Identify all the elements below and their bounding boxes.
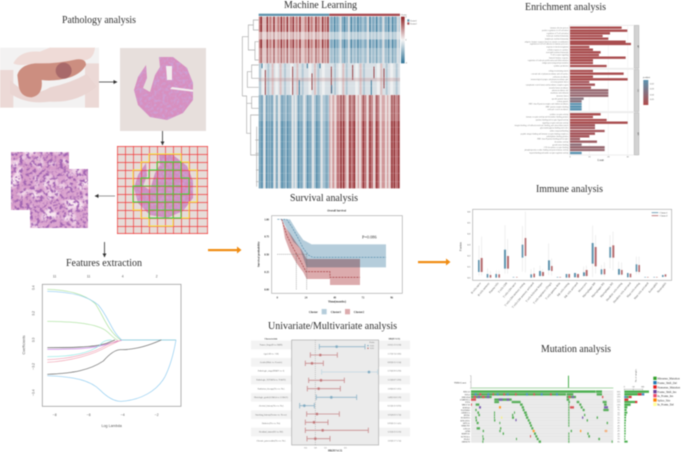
enrichment term labels: regulation of leukocyte proliferation and differentiation (528, 59, 568, 62)
enrichment count axis: Count (597, 159, 604, 162)
immune legend (652, 212, 668, 218)
oncoplot gene labels: PLEC (464, 438, 470, 441)
oncoplot percentage labels: 3% (617, 436, 620, 438)
KM axis labels: Survival probability (257, 241, 261, 267)
oncoplot percentage labels: 54% (617, 394, 621, 396)
forest text columns: Age(≥60 vs. <60) (263, 352, 279, 355)
oncoplot percentage labels (617, 391, 621, 443)
immune y axis: 0.3 (467, 245, 471, 247)
oncoplot percentage labels: 20% (617, 397, 621, 399)
forest axis: 1.0 (314, 447, 317, 449)
chart: LASSO coefficient paths: 0.0 (32, 338, 36, 342)
oncoplot percentage labels: 5% (617, 412, 620, 414)
enrichment term labels: heparin binding and amide receptor regulator activity (529, 152, 568, 155)
oncoplot percentage labels: 4% (617, 425, 620, 427)
enrichment term labels: antigen processing and presentation (542, 62, 568, 65)
forest text columns: Pathologic_T(T3&T4 vs. T1&T2) (256, 379, 286, 382)
enrichment colour legend: 0.05 (650, 99, 655, 101)
KM axis labels: 0 (277, 296, 279, 299)
immune cell type labels: T cells follicular helper (525, 282, 543, 303)
enrichment term labels: plasma membrane raft (552, 89, 569, 92)
heatmap colour legend: Cluster1 (410, 19, 417, 22)
oncoplot legend: Nonsense_Mutation (657, 385, 681, 389)
enrichment colour legend: 0.03 (650, 88, 655, 90)
chart: LASSO coefficient paths: 11 (87, 274, 91, 278)
chart: enrichment bar chart (515, 25, 655, 162)
arrow: orange to middle column (208, 246, 242, 254)
oncoplot gene labels: ARID1A (461, 412, 470, 415)
enrichment term labels: T cell receptor signaling (551, 54, 568, 57)
forest text columns: 2.02(1.13-3.58) (388, 344, 401, 347)
enrichment term labels: endocytic vesicle membrane (548, 109, 569, 111)
enrichment term labels: leukocyte mediated immunity (546, 36, 568, 38)
immune y axis: Fraction (460, 242, 463, 251)
heatmap lower block (259, 95, 400, 188)
arrow: grid to patches (95, 195, 115, 197)
forest text columns: 1.31(0.55-3.10) (388, 431, 401, 434)
chart: LASSO coefficient paths: 11 (53, 274, 57, 278)
enrichment term labels: glycosaminoglycan binding molecules (540, 127, 569, 130)
enrichment term labels: regulation of cell-cell adhesion in immune processes (530, 43, 569, 46)
forest text columns: Gender(Male vs. Female) (260, 361, 282, 364)
chart: clustered heatmap (242, 13, 417, 188)
title: Survival analysis: Survival analysis (290, 193, 358, 204)
oncoplot gene labels: DNAH11 (460, 419, 471, 422)
chart: LASSO coefficient paths (22, 274, 181, 428)
forest text columns: Tumor_Stage(II vs. I&III) (260, 344, 283, 347)
immune cell type labels: T cells CD8 (498, 282, 509, 294)
chart: LASSO coefficient paths: −6 (87, 413, 91, 417)
enrichment term labels: cellular response to cytokine (547, 49, 569, 51)
enrichment term labels: humoral immune response (549, 57, 568, 59)
immune cell type labels: T cells CD4 memory resting (504, 282, 526, 307)
oncoplot gene labels: PCDH15 (461, 417, 471, 420)
immune cell type labels: NK cells activated (564, 282, 579, 299)
KM axis labels (257, 209, 394, 304)
KM axis labels: 48 (333, 296, 337, 299)
oncoplot gene labels: ATM (465, 430, 471, 433)
forest axis: 1.5 (324, 447, 327, 449)
KM confidence band: Cluster1 (282, 219, 386, 267)
KM axis labels: 0.50 (264, 253, 270, 256)
heatmap dendrogram (242, 20, 259, 187)
forest legend: >0.05 (370, 347, 374, 350)
immune cell type labels: Plasma cells (489, 282, 499, 294)
forest text columns: 3.70(0.90-5.98) (388, 370, 401, 373)
enrichment term labels: immune receptor activity and chemokine binding proteins (526, 116, 569, 119)
immune cell type labels: T cells regulatory (Tregs) (533, 282, 552, 305)
immune cell type labels: T cells CD4 memory activated (512, 282, 535, 309)
forest text columns: Characteristic (264, 339, 278, 341)
immune y axis: 0.4 (467, 234, 471, 236)
enrichment term labels: adaptive immune response based on somatic recombination (525, 41, 568, 43)
forest text columns: 1.48(1.04-2.10) (388, 396, 401, 399)
enrichment colour legend: 0.04 (650, 94, 655, 96)
enrichment BP bars (570, 28, 631, 66)
immune cell type labels: NK cells resting (557, 282, 571, 297)
oncoplot gene labels: TP53 (465, 393, 471, 396)
forest text columns: Residual_tumor(R1 vs. R0) (259, 431, 283, 434)
enrichment term labels: cytokine production (554, 66, 568, 68)
oncoplot side axis: 100 (641, 386, 644, 388)
immune cell type labels: Macrophages M2 (600, 282, 615, 298)
oncoplot percentage labels: 4% (617, 428, 620, 430)
enrichment count axis (569, 157, 629, 162)
KM legend (309, 309, 365, 314)
image: extracted tissue patches (11, 152, 88, 228)
enrichment term labels: growth factor binding (552, 143, 568, 146)
enrichment term labels (515, 26, 569, 155)
enrichment count axis: 10 (588, 157, 590, 159)
oncoplot gene labels: GNAS (463, 427, 471, 430)
forest text columns (254, 338, 401, 442)
forest axis: 2.5 (344, 447, 347, 449)
heatmap colour legend: 0 (405, 40, 406, 42)
enrichment term labels: collagen-containing matrix (549, 70, 568, 73)
enrichment term labels: peptide antigen binding and immune receptor binding complexes (521, 132, 569, 135)
chart: LASSO coefficient paths: −0.4 (32, 389, 36, 396)
arrow: slide to grid (162, 131, 164, 145)
oncoplot percentage labels: 11% (617, 399, 621, 401)
chart: LASSO coefficient paths: −8 (53, 413, 57, 417)
immune y axis (460, 211, 471, 279)
title: Features extraction: Features extraction (66, 258, 143, 269)
title: Mutation analysis: Mutation analysis (541, 344, 611, 355)
oncoplot legend: In_Frame_Del (657, 403, 674, 407)
enrichment term labels: CCR chemokine receptor binding (544, 146, 568, 149)
immune legend: Cluster1 (660, 212, 668, 215)
immune cell type labels: Mast cells resting (626, 282, 641, 298)
immune cell type labels: T cells CD4 naive (502, 281, 518, 299)
enrichment term labels: neutrophil mediated immunity (546, 52, 568, 54)
enrichment colour legend: 0.02 (650, 84, 654, 86)
enrichment term labels: sulfur compound binding (550, 130, 568, 133)
enrichment MF bars (570, 114, 628, 153)
oncoplot gene labels: OBSCN (462, 441, 470, 444)
immune boxes: Cluster2 (481, 238, 666, 278)
arrow: illustration to slide (99, 81, 117, 83)
title: Pathology analysis: Pathology analysis (62, 15, 136, 26)
enrichment facet strips: BP (636, 45, 638, 49)
enrichment colour legend (643, 76, 655, 105)
oncoplot top mutation count bars: TMB/Count (454, 382, 466, 385)
immune cell type labels: Eosinophils (648, 282, 658, 294)
forest text columns: 1.17(0.74-1.86) (388, 352, 401, 355)
KM legend: Cluster2 (354, 310, 365, 314)
enrichment CC bars (570, 71, 628, 109)
title: Univariate/Multivariate analysis: Univariate/Multivariate analysis (268, 321, 397, 332)
KM axis labels: 72 (362, 296, 365, 299)
oncoplot percentage labels: 5% (617, 417, 620, 419)
KM confidence band: Cluster2 (282, 219, 360, 285)
enrichment term labels: signaling receptor activator activity (542, 121, 568, 124)
enrichment term labels: lysosome lumen (556, 95, 568, 97)
forest plot area (292, 340, 379, 445)
KM plot frame (272, 216, 402, 293)
immune whiskers (479, 212, 639, 278)
oncoplot percentage labels: 4% (617, 431, 620, 433)
oncoplot legend: Frame_Shift_Ins (657, 390, 676, 394)
oncoplot percentage labels: 4% (617, 423, 620, 425)
oncoplot percentage labels: 3% (617, 439, 620, 441)
KM legend: Cluster1 (331, 310, 342, 314)
immune cell type labels: Monocytes (578, 282, 588, 293)
oncoplot legend: Missense_Mutation (657, 377, 680, 381)
enrichment term labels: positive regulation of cell activation (542, 29, 568, 32)
oncoplot percentage labels: 66% (617, 391, 621, 393)
heatmap colour legend: -4 (405, 62, 407, 64)
oncoplot legend: In_Frame_Ins (657, 394, 673, 398)
chart: mutation oncoplot (454, 369, 681, 444)
arrow: orange to right column (418, 258, 450, 266)
oncoplot side axis: 50 (632, 386, 634, 388)
immune cell type labels: Mast cells activated (634, 282, 650, 300)
chart: immune cell fraction box plot (460, 209, 672, 309)
heatmap row separators (259, 24, 400, 182)
chart: LASSO coefficient paths: −4 (121, 413, 125, 417)
immune cell type labels (471, 281, 667, 309)
forest text columns: Histologic_grade(G3&G4 vs. G1&G2) (254, 396, 288, 399)
oncoplot percentage labels: 8% (617, 441, 620, 443)
immune cell type labels: Neutrophils (657, 282, 667, 294)
illustration: pancreas with tumor (0, 48, 99, 108)
oncoplot percentage labels: 7% (617, 410, 620, 412)
title: Enrichment analysis: Enrichment analysis (525, 2, 606, 13)
enrichment facet strips: CC (636, 89, 638, 93)
forest text columns: 1.08(0.63-1.85) (388, 387, 401, 390)
heatmap cluster annotation bar (259, 14, 400, 16)
chart: LASSO coefficient paths: −0.2 (32, 363, 36, 370)
arrow: patches to feature extraction (104, 242, 106, 257)
enrichment term labels: tertiary granule (557, 100, 569, 103)
KM axis labels: 0.00 (264, 288, 270, 291)
oncoplot gene labels: TGFBR2 (461, 409, 471, 412)
chart: LASSO coefficient paths: 0.4 (32, 285, 36, 290)
title: Machine Learning: Machine Learning (284, 0, 358, 11)
enrichment term labels: specific granule lumen (552, 97, 568, 100)
immune y axis: 0.2 (467, 255, 471, 257)
immune cell type labels: Macrophages M1 (591, 282, 606, 298)
enrichment term labels: MHC class II protein binding and receptor (537, 138, 569, 141)
enrichment term labels: vacuolar lumen membrane (549, 87, 569, 89)
oncoplot gene labels: SCN10A (461, 435, 470, 438)
oncoplot percentage labels: 18% (617, 404, 621, 406)
oncoplot legend: Splice_Site (657, 398, 671, 402)
chart: forest plot (251, 338, 410, 452)
oncoplot gene labels: RYR1 (464, 414, 471, 417)
enrichment term labels: immune effector process (550, 26, 569, 29)
oncoplot gene labels: CDKN2A (460, 399, 470, 402)
enrichment term labels: chemokine activity (554, 141, 568, 143)
KM curve: Cluster1 (277, 219, 386, 257)
immune y axis: 0.1 (467, 266, 471, 268)
forest text columns: 0.90(0.55-1.45) (388, 422, 401, 425)
immune cell type labels: Dendritic cells activated (613, 282, 632, 304)
forest axis (304, 447, 347, 452)
enrichment panels (569, 25, 634, 155)
image: H&E tissue slide (120, 48, 206, 131)
heatmap mixed block (259, 63, 400, 95)
KM axis labels: 24 (305, 296, 308, 299)
oncoplot gene labels: RNF43 (463, 406, 471, 409)
oncoplot percentage labels: 5% (617, 420, 620, 422)
chart: LASSO coefficient paths: Coefficients (22, 335, 26, 355)
chart: LASSO coefficient paths: −2 (155, 413, 159, 417)
enrichment term labels: lymphocyte mediated immunity (545, 38, 568, 40)
KM axis labels: 0.25 (264, 271, 270, 274)
immune y axis: 0.6 (467, 211, 471, 213)
oncoplot gene labels (460, 391, 471, 444)
oncoplot gene labels: KRAS (463, 391, 471, 394)
chart: Kaplan-Meier overall survival (257, 209, 402, 314)
oncoplot percentage labels: 4% (617, 433, 620, 435)
enrichment term labels: cytokine receptor activity (550, 114, 568, 116)
oncoplot gene labels: SMAD4 (462, 396, 471, 399)
heatmap colour legend: 4 (405, 17, 406, 19)
KM curve: Cluster2 (282, 219, 360, 277)
forest text columns: Chronic_pancreatitis(Yes vs. No) (257, 439, 286, 442)
forest text columns: Alcohol_history(Yes vs. No) (259, 405, 284, 408)
enrichment term labels: phosphotyrosine residue binding and protein kinase activity (525, 149, 568, 152)
forest legend (367, 342, 375, 350)
oncoplot gene labels: HMCN1 (461, 425, 471, 428)
immune cell type labels: B cells memory (477, 282, 491, 297)
heatmap colour legend: Cluster2 (410, 22, 417, 25)
enrichment term labels: regulation of T cell activation (547, 32, 568, 35)
immune cell type labels: T cells gamma delta (545, 281, 562, 300)
KM axis labels: Time(months) (328, 300, 346, 304)
forest axis: 0.5 (304, 447, 307, 449)
enrichment term labels: secretory granule lumen (551, 81, 568, 84)
oncoplot legend (653, 377, 681, 407)
title: Immune analysis: Immune analysis (536, 184, 603, 195)
KM axis labels: 96 (390, 296, 394, 299)
forest text columns: 1.05(0.63-1.74) (388, 413, 401, 416)
oncoplot side axis: No. of samples (635, 369, 638, 382)
heatmap colour legend (401, 13, 417, 64)
enrichment term labels: external side of plasma membrane and cell surface (531, 72, 568, 75)
forest text columns: 0.82(0.55-1.24) (388, 361, 401, 364)
immune y axis: 0.0 (467, 277, 471, 279)
oncoplot side bars (624, 389, 649, 442)
oncoplot legend: Frame_Shift_Del (657, 381, 677, 385)
oncoplot side axis (624, 369, 644, 388)
chart: LASSO coefficient paths: 2 (156, 274, 158, 278)
enrichment facet strips: MF (636, 133, 638, 136)
enrichment term labels: cytokine binding and receptor ligand activity (535, 119, 568, 122)
immune cell type labels: Dendritic cells resting (606, 282, 624, 302)
forest text columns: HR(95%CI) (389, 338, 400, 341)
immune boxes: Cluster1 (478, 243, 664, 278)
immune plot frame (473, 209, 672, 280)
chart: LASSO coefficient paths: 4 (122, 274, 124, 278)
forest text columns: 0.53(0.31-0.90) (388, 405, 401, 408)
oncoplot percentage labels: 35% (617, 402, 621, 404)
enrichment term labels: endosome membrane (553, 76, 569, 78)
oncoplot percentage labels: 5% (617, 415, 620, 417)
forest legend: P.value (369, 342, 375, 344)
oncoplot percentage labels: 8% (617, 407, 620, 409)
image: tiled slide grid (117, 146, 208, 234)
oncoplot matrix (471, 390, 613, 443)
enrichment term labels: cytoplasmic vesicle lumen and membrane complex region (526, 83, 568, 86)
KM axis labels: 1.00 (264, 218, 270, 221)
heatmap colour legend: Cluster (401, 13, 407, 16)
enrichment count axis: 0 (569, 157, 571, 159)
KM axis labels: 0.75 (264, 236, 270, 239)
enrichment facet strips (634, 25, 639, 155)
immune legend: Cluster2 (660, 215, 668, 218)
enrichment term labels: response to interferon-gamma (546, 46, 569, 49)
forest text columns: Radiation_therapy(Yes vs. No) (258, 387, 285, 390)
forest text columns: 1.13(0.67-1.90) (388, 379, 401, 382)
KM axis labels: Overall Survival (327, 209, 346, 212)
forest intervals: Cluster1 (300, 344, 378, 408)
forest row bands (251, 345, 410, 432)
enrichment term labels: MHC class II protein complex and clathrin membrane (529, 104, 569, 106)
enrichment term labels: membrane microdomain (550, 93, 568, 95)
enrichment count axis: 20 (607, 157, 609, 159)
oncoplot gene labels: TTN (465, 401, 470, 404)
forest text columns: Smoking_history(Former vs. Never) (255, 413, 287, 416)
enrichment count axis: 30 (627, 157, 629, 159)
immune cell type labels: B cells naive (471, 281, 482, 294)
forest text columns: Pathologic_stage(III&IV vs. I) (258, 370, 285, 373)
oncoplot side axis: 0 (624, 386, 625, 388)
forest reference line (314, 340, 316, 445)
KM legend: Cluster (309, 310, 319, 314)
enrichment term labels: carbohydrate binding proteins (546, 135, 569, 138)
oncoplot gene labels: MUC16 (462, 404, 471, 407)
enrichment term labels: immunological synapse and plasma membrane part (531, 78, 569, 81)
oncoplot gene labels: KMT2C (462, 433, 470, 436)
immune cell type labels: Macrophages M0 (582, 282, 597, 298)
KM p-value: P=0.086 (362, 234, 377, 239)
enrichment term labels: MHC protein complex binding (546, 105, 568, 108)
KM median guide lines (277, 254, 307, 289)
enrichment colour legend: p.adjust (643, 76, 650, 79)
chart: LASSO coefficient paths: Log Lambda (101, 424, 123, 428)
forest text columns: 1.00(0.57-1.74) (388, 439, 401, 442)
forest text columns: Diabetes(Yes vs. No) (262, 422, 280, 425)
immune y axis: 0.5 (467, 223, 471, 225)
forest legend: <0.05 (370, 344, 374, 347)
heatmap upper block (259, 17, 400, 63)
oncoplot gene labels: SPTA1 (463, 422, 471, 425)
forest intervals: Cluster2 (305, 352, 368, 441)
enrichment term labels: integrin binding, cell adhesion molecule binding, and extracellular matrix (515, 124, 568, 127)
chart: LASSO coefficient paths: 0.2 (32, 311, 36, 316)
